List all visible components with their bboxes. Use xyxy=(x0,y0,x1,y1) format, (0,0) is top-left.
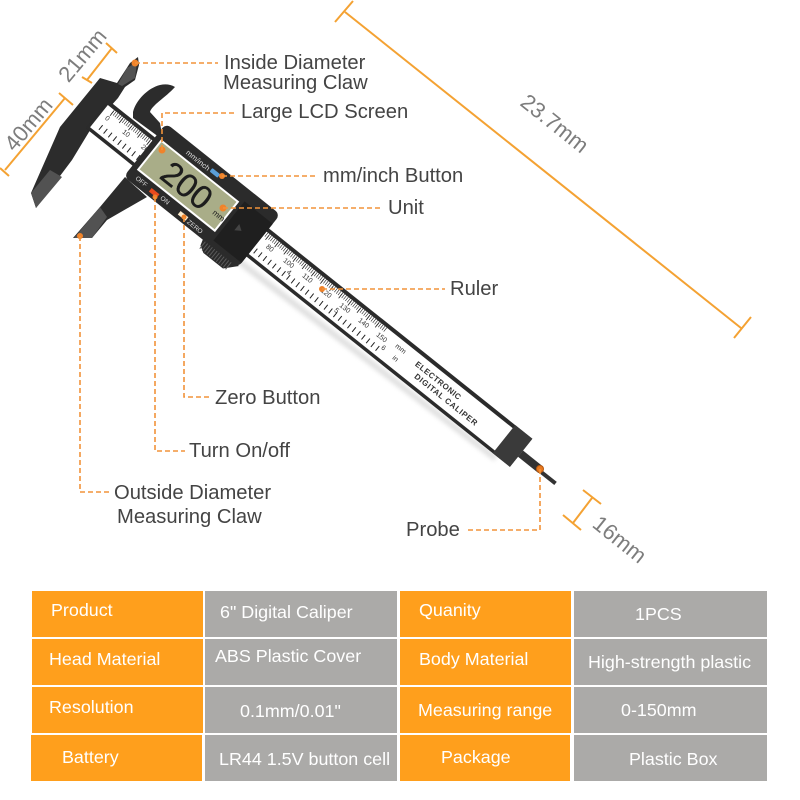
callout: turn on/off xyxy=(152,194,290,462)
callout: turn on/off: Turn On/off xyxy=(189,440,290,462)
row: battery and package: Package xyxy=(441,747,511,767)
callout: large lcd screen xyxy=(158,101,408,154)
callout: inside diameter measuring claw: Measuring Claw xyxy=(223,72,368,94)
ruler beam xyxy=(71,86,580,514)
end block and probe xyxy=(493,425,568,496)
callout: outside diameter measuring claw xyxy=(77,233,271,528)
dimension: 16mm probe xyxy=(563,490,651,568)
callout: inside diameter measuring claw xyxy=(132,52,368,94)
row: product and quantity xyxy=(32,591,767,637)
millimetre scale: 80 xyxy=(264,244,275,254)
beam lettering xyxy=(407,360,486,428)
callout: inside diameter measuring claw: Inside Diameter xyxy=(224,52,366,74)
millimetre scale: 150 xyxy=(374,332,388,344)
row: battery and package: Battery xyxy=(62,747,119,767)
callout: ruler xyxy=(319,278,499,300)
beam lettering: DIGITAL CALIPER xyxy=(413,372,479,428)
callout: probe xyxy=(406,466,544,541)
millimetre scale xyxy=(98,111,409,364)
callout: outside diameter measuring claw: Outside Diameter xyxy=(114,482,271,504)
power switch: OFF xyxy=(134,175,148,189)
row: materials xyxy=(32,639,767,685)
millimetre scale: 110 xyxy=(300,272,314,285)
row: resolution and range: Resolution xyxy=(49,697,134,717)
row: battery and package: LR44 1.5V button cell xyxy=(219,749,390,769)
row: resolution and range: 0-150mm xyxy=(621,700,697,720)
callout: unit xyxy=(220,197,424,219)
mm/inch button xyxy=(184,148,221,180)
row: materials: High-strength plastic xyxy=(588,652,751,672)
mm/inch button: mm/inch xyxy=(184,148,212,173)
dimension: 21mm inside claw: 21mm xyxy=(53,24,112,87)
callout: unit: Unit xyxy=(388,197,424,219)
row: resolution and range: Measuring range xyxy=(418,700,552,720)
row: resolution and range: 0.1mm/0.01" xyxy=(240,701,341,721)
display head xyxy=(124,123,280,268)
caliper illustration xyxy=(31,57,580,514)
thumb wheel xyxy=(196,236,240,275)
row: battery and package xyxy=(31,735,767,781)
millimetre scale: 120 xyxy=(319,287,333,300)
millimetre scale: 10 xyxy=(120,129,131,139)
row: materials: Head Material xyxy=(49,649,160,669)
callout: mm/inch button: mm/inch Button xyxy=(323,165,463,187)
millimetre scale: 140 xyxy=(357,317,370,330)
millimetre scale: 4 xyxy=(285,269,292,277)
dimension: 23.7mm length xyxy=(335,1,751,338)
millimetre scale: 100 xyxy=(281,257,295,270)
millimetre scale: in xyxy=(391,355,399,364)
dimension: 40mm outside claw: 40mm xyxy=(0,93,58,156)
row: materials: ABS Plastic Cover xyxy=(215,646,361,666)
row: resolution and range xyxy=(32,687,767,733)
specification table xyxy=(31,591,767,781)
zero button xyxy=(176,211,204,236)
callout: mm/inch button xyxy=(219,165,463,187)
millimetre scale: 130 xyxy=(338,302,351,315)
row: product and quantity: Quanity xyxy=(419,600,481,620)
power switch xyxy=(134,175,171,207)
millimetre scale: 20 xyxy=(139,144,150,154)
lcd screen: mm xyxy=(211,208,227,224)
row: materials: Body Material xyxy=(419,649,528,669)
millimetre scale: 0 xyxy=(103,115,111,123)
callout: zero button: Zero Button xyxy=(215,387,320,409)
row: product and quantity: Product xyxy=(51,600,113,620)
sliding lower claw xyxy=(73,177,147,238)
zero button: ZERO xyxy=(185,219,204,236)
row: product and quantity: 6" Digital Caliper xyxy=(220,602,353,622)
lcd screen: 200 xyxy=(154,154,220,217)
callout: zero button xyxy=(182,214,320,409)
callout: large lcd screen: Large LCD Screen xyxy=(241,101,408,123)
callout: probe: Probe xyxy=(406,519,460,541)
sliding upper jaw xyxy=(133,84,175,140)
callout: ruler: Ruler xyxy=(450,278,499,300)
row: product and quantity: 1PCS xyxy=(635,604,682,624)
dimension: 16mm probe: 16mm xyxy=(588,511,651,568)
millimetre scale: 5 xyxy=(333,307,340,315)
lcd screen xyxy=(137,139,239,232)
row: battery and package: Plastic Box xyxy=(629,749,718,769)
dimension: 23.7mm length: 23.7mm xyxy=(516,89,594,158)
power switch: ON xyxy=(158,195,171,207)
millimetre scale: 6 xyxy=(379,344,387,352)
dimension: 40mm outside claw xyxy=(0,93,73,176)
fixed jaw with inside and outside claw xyxy=(31,57,139,208)
callout: outside diameter measuring claw: Measuring Claw xyxy=(117,506,262,528)
beam lettering: ELECTRONIC xyxy=(413,360,463,402)
millimetre scale: mm xyxy=(394,343,407,356)
